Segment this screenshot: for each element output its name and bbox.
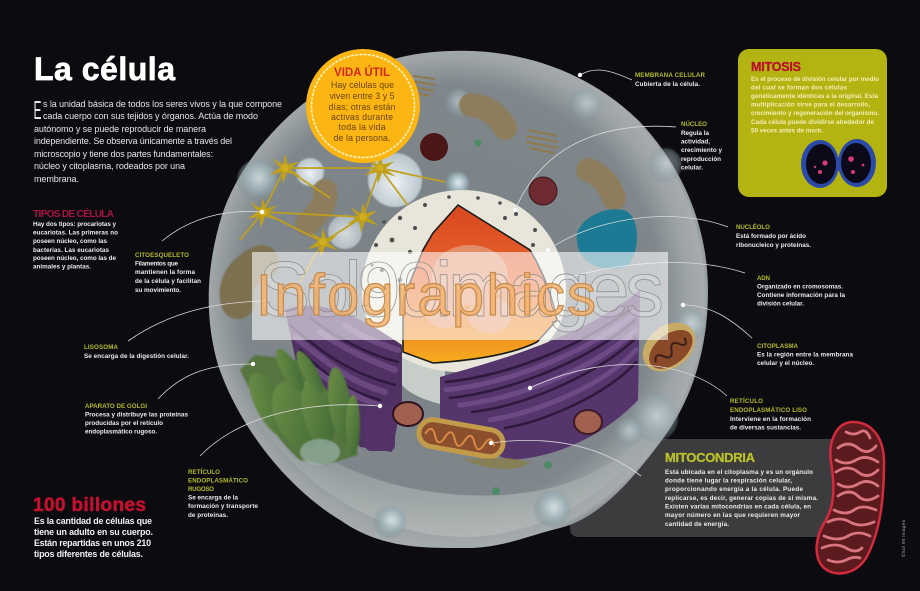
label: membrana celular: Cubierta de la célula. (635, 81, 700, 88)
callout: tipos de célula (33, 207, 118, 270)
callout: 100 billones: Es la cantidad de células que (34, 516, 152, 526)
label: retículo endoplasmático liso (730, 397, 811, 432)
badge text: de la persona. (334, 133, 390, 143)
nuclear pores (370, 195, 537, 282)
label: nucléolo: ribonucleico y proteínas. (736, 242, 811, 249)
mitosis text: genéticamente idénticas a la original. Esta (751, 93, 878, 100)
label: retículo endoplasmático rugoso (188, 468, 258, 519)
text block: intro: cada cuerpo con sus tejidos y órganos. Actúa de modo (43, 111, 258, 121)
mitosis text: Cada célula puede dividirse alrededor de (751, 119, 874, 126)
white spheres (328, 153, 422, 249)
text block: intro: E (34, 95, 42, 125)
body: Existen varias mitocondrias en cada célula, en (665, 504, 811, 510)
mitochondrion right (633, 313, 705, 381)
label: retículo endoplasmático liso: RETÍCULO (730, 397, 763, 405)
label: núcleo: actividad, (681, 138, 710, 146)
label: citoesqueleto: CITOESQUELETO (135, 252, 189, 259)
title: La célula (34, 51, 175, 87)
badge heading: VIDA ÚTIL (334, 66, 390, 79)
badge text (328, 80, 396, 143)
heading: MITOCONDRIA (665, 450, 756, 465)
cutaway nucleoplasm (403, 205, 557, 363)
nuclear envelope (362, 190, 566, 373)
mitosis text (751, 76, 879, 134)
text block: intro (34, 95, 282, 184)
text block: intro: autónomo y se puede reproducir de manera (34, 124, 206, 134)
label: lisosoma: Se encarga de la digestión celular. (84, 353, 189, 360)
callout: tipos de célula: TIPOS DE CÉLULA (33, 207, 114, 220)
body: proporcionando energía a la célula. Puede (665, 486, 803, 493)
label: núcleo: crecimiento y (681, 147, 722, 154)
panel: mitosis (738, 49, 887, 197)
callout: tipos de célula: animales y plantas. (33, 264, 91, 270)
cell membrane body (209, 51, 708, 548)
label: núcleo (681, 121, 722, 172)
label: lisosoma: LISOSOMA (84, 344, 119, 351)
panel: mitocondria background (570, 439, 850, 537)
mitosis text: 50 veces antes de morir. (751, 128, 823, 134)
callout: tipos de célula: Hay dos tipos: procariotas y (33, 221, 116, 228)
label: retículo endoplasmático rugoso: de proteínas. (188, 512, 228, 519)
label: adn: Contiene información para la (757, 292, 845, 299)
label: núcleo: reproducción (681, 156, 721, 163)
watermark: Infographics (256, 263, 596, 328)
mitosis text: multiplicación sirve para el desarrollo, (751, 102, 870, 108)
text block: intro: microscopio y tiene dos partes fundamentales: (34, 149, 213, 159)
leader lines (128, 70, 752, 476)
callout: 100 billones (33, 495, 153, 559)
leader dots (251, 73, 685, 445)
illustration: mitochondrion (817, 422, 884, 573)
nucleus (362, 190, 566, 373)
text block: intro: independiente. Se observa únicamente a través del (34, 136, 232, 146)
text block: intro: núcleo y citoplasma, rodeados por una (34, 161, 185, 171)
dotted ring (312, 54, 414, 158)
body: Está ubicada en el citoplasma y es un orgánulo (665, 469, 813, 476)
mitosis text: del cual se forman dos células (751, 84, 847, 92)
text block: intro: membrana. (34, 174, 79, 184)
callout: vida útil (306, 49, 420, 163)
callout: tipos de célula: poseen núcleo, como las (33, 238, 107, 245)
panel: mitocondria text (665, 450, 818, 528)
label: retículo endoplasmático rugoso: Se encarga de la (188, 494, 238, 502)
body: donde tiene lugar la respiración celular, (665, 478, 792, 484)
badge (306, 49, 420, 163)
label: citoplasma: Es la región entre la membrana (757, 352, 853, 358)
lysosomes (393, 402, 423, 426)
label: retículo endoplasmático rugoso: ENDOPLASMÁTICO (188, 478, 248, 484)
mitosis box (738, 49, 887, 197)
label: citoesqueleto: su movimiento. (135, 287, 181, 294)
label: retículo endoplasmático liso: ENDOPLASMÁTICO LISO (730, 407, 807, 414)
tan organelles (237, 105, 614, 302)
label: citoplasma: celular y el núcleo. (757, 360, 814, 367)
illustration: cell (209, 51, 708, 548)
callout: tipos de célula: poseen núcleo, como las de (33, 255, 116, 262)
mitochondrion bottom (414, 415, 508, 462)
badge text: viven entre 3 y 5 (330, 91, 395, 101)
rough endoplasmic reticulum (285, 306, 402, 452)
callout: 100 billones: 100 billones (33, 495, 146, 516)
label: nucléolo: Está formado por ácido (736, 233, 806, 240)
label: nucléolo (736, 223, 811, 249)
label: núcleo: Regula la (681, 130, 709, 137)
callout: 100 billones: tipos diferentes de células. (34, 549, 143, 559)
golgi apparatus (240, 345, 360, 465)
label: retículo endoplasmático rugoso: formación y transporte (188, 503, 258, 510)
label: citoesqueleto: de la célula y facilitan (135, 278, 201, 285)
label: adn: ADN (757, 275, 771, 282)
badge text: días; otras están (328, 102, 396, 112)
callout: 100 billones: Están repartidas en unos 210 (34, 538, 151, 548)
small green vesicles (408, 140, 552, 495)
label: aparato de golgi: endoplasmático rugoso. (85, 428, 157, 436)
label: citoplasma (757, 343, 853, 367)
collar under nucleus (400, 345, 445, 405)
label: adn: división celular. (757, 300, 804, 308)
cytoplasm lower zone (232, 370, 690, 537)
label: lisosoma (84, 344, 189, 360)
dark organelles (420, 133, 448, 161)
golgi stacks top (412, 76, 558, 153)
body: mayor número en las que requieren mayor (665, 512, 801, 519)
label: citoesqueleto: Filamentos que (135, 260, 178, 268)
vesicles (237, 89, 706, 538)
nucleolus inside (425, 245, 512, 333)
watermark: Sol90images (258, 245, 664, 333)
label: aparato de golgi (85, 403, 188, 436)
icon: dividing cell (801, 139, 876, 188)
label: retículo endoplasmático liso: Interviene en la formación (730, 416, 811, 423)
cytoskeleton (240, 154, 445, 282)
label: retículo endoplasmático liso: de diversas sustancias. (730, 424, 801, 432)
callout: tipos de célula: eucariotas. Las primeras no (33, 230, 118, 236)
label: membrana celular: MEMBRANA CELULAR (635, 72, 706, 79)
badge text: activas durante (331, 112, 393, 122)
label: retículo endoplasmático rugoso: RUGOSO (188, 486, 214, 493)
body: cantidad de energía. (665, 521, 729, 528)
credit: ©Sol 90 Images (900, 519, 906, 557)
mitosis text: Es el proceso de división celular por medio (751, 76, 879, 83)
text block: intro: s la unidad básica de todos los seres vivos y la que compone (43, 99, 282, 109)
label: citoplasma: CITOPLASMA (757, 343, 799, 350)
label: nucléolo: NUCLÉOLO (736, 223, 770, 231)
smooth endoplasmic reticulum (440, 290, 640, 460)
label: aparato de golgi: Procesa y distribuye las proteínas (85, 412, 188, 418)
callout: 100 billones: tiene un adulto en su cuerpo. (34, 527, 153, 537)
label: membrana celular (635, 72, 706, 88)
mitosis text: crecimiento y regeneración del organismo. (751, 110, 879, 117)
badge text: Hay células que (331, 80, 394, 90)
nucleolus blue organelle (577, 209, 637, 269)
label: núcleo: NÚCLEO (681, 121, 707, 128)
label: citoesqueleto (135, 252, 201, 294)
label: citoesqueleto: mantienen la forma (135, 269, 195, 276)
label: aparato de golgi: APARATO DE GOLGI (85, 403, 147, 410)
mitosis heading: MITOSIS (751, 60, 801, 74)
body (665, 469, 818, 528)
body: replicarse, es decir, generar copias de sí misma. (665, 495, 818, 502)
mitochondrion shadow (462, 458, 530, 469)
callout: tipos de célula: bacterias. Las eucariotas (33, 247, 109, 254)
label: retículo endoplasmático rugoso: RETÍCULO (188, 468, 220, 476)
label: núcleo: celular. (681, 164, 703, 172)
badge text: toda la vida (338, 122, 386, 132)
label: adn: Organizado en cromosomas. (757, 284, 843, 290)
label: adn (757, 275, 845, 308)
label: aparato de golgi: producidas por el retículo (85, 420, 163, 427)
